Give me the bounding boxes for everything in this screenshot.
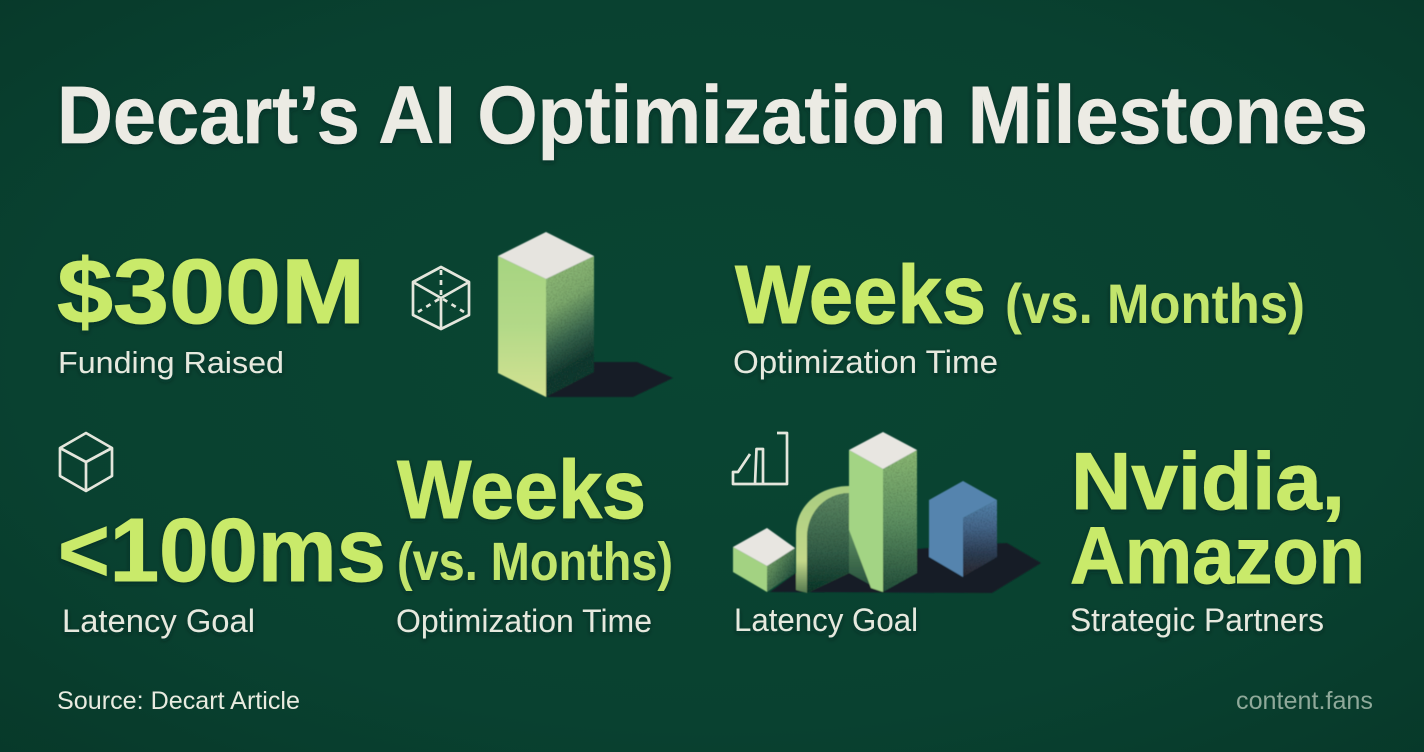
group shadow — [770, 543, 1041, 593]
block right face — [546, 256, 594, 397]
funding value: $300M — [57, 241, 365, 343]
arch block — [796, 486, 849, 593]
optimization label: Optimization Time — [733, 344, 998, 380]
source: Source: Decart Article — [57, 687, 300, 715]
optimization label 2: Optimization Time — [396, 603, 652, 639]
funding label: Funding Raised — [58, 345, 284, 380]
block top face — [498, 232, 594, 279]
weeks value: Weeks — [735, 248, 986, 341]
title: Decart’s AI Optimization Milestones — [57, 70, 1368, 161]
stat: partners — [1070, 437, 1365, 638]
illustration: tall isometric block — [498, 232, 673, 397]
blue bar — [929, 481, 997, 577]
icon: cube outline — [60, 433, 112, 491]
stat: latency — [58, 501, 386, 639]
tall bar — [849, 432, 917, 592]
brand: content.fans — [1236, 687, 1373, 715]
weeks value 2: Weeks — [397, 443, 646, 536]
stat: optimization time 2 — [396, 443, 673, 639]
nvidia: Nvidia, — [1071, 437, 1345, 527]
partners label: Strategic Partners — [1070, 602, 1324, 638]
block shadow — [547, 362, 673, 397]
latency value: <100ms — [58, 501, 386, 601]
latency label 2: Latency Goal — [734, 602, 918, 638]
vs months 2: (vs. Months) — [397, 532, 673, 592]
icon: bar chart outline — [733, 433, 787, 484]
small cube — [733, 528, 795, 592]
icon: dashed cube outline — [413, 267, 469, 329]
illustration: isometric bar group — [733, 432, 1041, 593]
block left face — [498, 256, 546, 397]
stat: optimization time — [733, 248, 1305, 380]
amazon: Amazon — [1070, 511, 1365, 601]
vs months: (vs. Months) — [1005, 272, 1305, 335]
latency label: Latency Goal — [62, 603, 255, 639]
stat: funding — [57, 241, 365, 380]
